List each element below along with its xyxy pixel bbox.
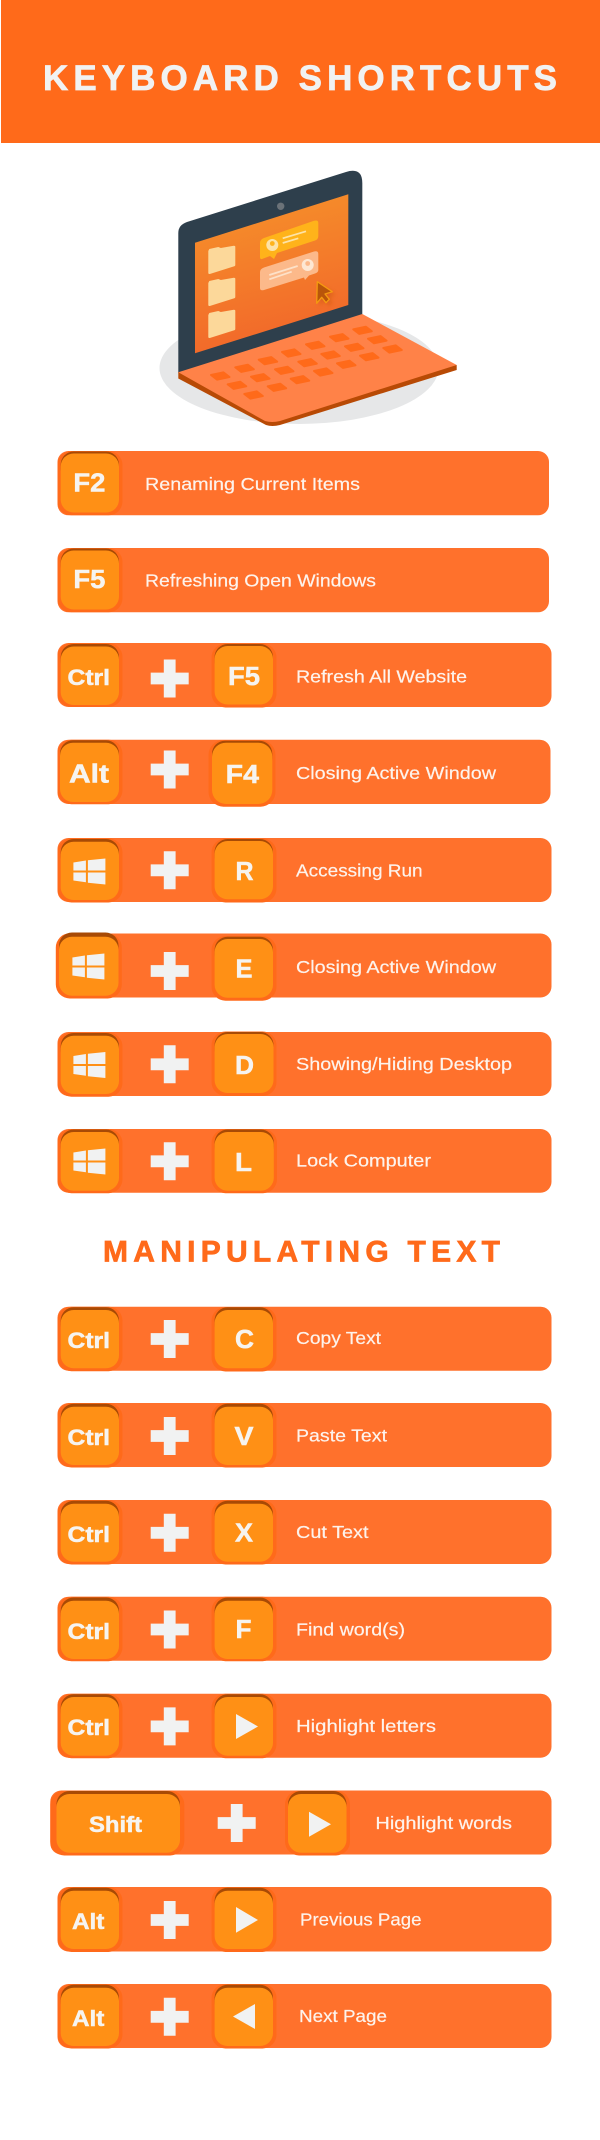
- description: Next Page: [299, 2006, 387, 2026]
- icon: windows logo: [72, 954, 104, 980]
- icon: windows logo: [73, 1148, 105, 1174]
- plus: [151, 851, 189, 889]
- key: D: D: [235, 1052, 254, 1080]
- yellow chat bubble: [260, 220, 318, 259]
- header banner: [1, 0, 600, 143]
- heading: manipulating text: MANIPULATING TEXT: [103, 1236, 500, 1268]
- key: Alt: [58, 1887, 122, 1952]
- description: Closing Active Window: [296, 763, 496, 783]
- icon: windows logo: [73, 1052, 105, 1078]
- row: Alt + right arrow: [58, 1887, 552, 1952]
- plus: [218, 1804, 256, 1842]
- key: Ctrl: Ctrl: [68, 1425, 110, 1450]
- key: L: [212, 1129, 277, 1193]
- key: Windows: [56, 932, 122, 998]
- title: KEYBOARD SHORTCUTS: [43, 59, 557, 98]
- laptop base edge: [178, 365, 457, 426]
- webcam: [277, 203, 284, 210]
- row: Ctrl + V: [58, 1403, 552, 1468]
- row: Ctrl + X: [58, 1500, 552, 1564]
- description: Closing Active Window: [296, 957, 496, 977]
- key: Windows: [58, 1032, 122, 1097]
- key: Alt: Alt: [72, 2006, 105, 2031]
- key: F5: F5: [228, 663, 260, 691]
- plus: [151, 1320, 189, 1358]
- row: Win + D: [58, 1032, 552, 1097]
- keyboard keys: [211, 327, 402, 399]
- key: F: [212, 1597, 276, 1661]
- key: F4: F4: [226, 761, 260, 789]
- description: Paste Text: [296, 1426, 387, 1446]
- key: F5: F5: [73, 566, 105, 594]
- row: Alt + F4: [58, 740, 550, 807]
- description: Copy Text: [296, 1328, 381, 1348]
- key: Ctrl: [58, 1307, 122, 1371]
- key: F4: [208, 740, 276, 807]
- description: Accessing Run: [296, 861, 423, 881]
- description: Lock Computer: [296, 1151, 431, 1171]
- row: Ctrl + C: [58, 1307, 552, 1372]
- key: Ctrl: [58, 643, 122, 707]
- row: Shift + right arrow: [50, 1790, 552, 1856]
- row: Win + R: [58, 838, 552, 902]
- key: Alt: [58, 740, 122, 804]
- description: Find word(s): [296, 1620, 405, 1640]
- description: Showing/Hiding Desktop: [296, 1054, 512, 1074]
- plus: [151, 1610, 189, 1648]
- plus: [151, 1045, 189, 1083]
- description: Previous Page: [300, 1910, 422, 1930]
- plus: [151, 1142, 189, 1180]
- key: L: L: [235, 1149, 252, 1177]
- description: Highlight words: [375, 1813, 512, 1833]
- description: Refreshing Open Windows: [145, 571, 376, 591]
- key: Ctrl: [58, 1597, 122, 1661]
- key: Alt: Alt: [72, 1909, 105, 1934]
- key: D: [212, 1032, 276, 1096]
- key: F2: [58, 451, 122, 515]
- plus: [151, 750, 189, 788]
- key: Ctrl: [58, 1403, 122, 1468]
- key: Alt: [58, 1984, 122, 2048]
- key: Alt: Alt: [69, 760, 110, 788]
- description: Refresh All Website: [296, 667, 467, 687]
- key: Windows: [58, 1129, 122, 1193]
- key: X: [212, 1500, 276, 1564]
- key: F2: F2: [73, 470, 105, 498]
- plus: [151, 1417, 189, 1455]
- plus: [151, 952, 189, 990]
- key: Shift: [50, 1790, 184, 1856]
- key: Ctrl: [58, 1500, 122, 1564]
- description: Highlight letters: [296, 1716, 436, 1736]
- key: R: R: [236, 858, 254, 886]
- laptop screen: [195, 194, 348, 353]
- description: Cut Text: [296, 1522, 369, 1542]
- plus: [151, 660, 189, 698]
- plus: [151, 1514, 189, 1552]
- plus: [151, 1998, 189, 2036]
- key: F: F: [236, 1616, 252, 1644]
- key: Ctrl: Ctrl: [68, 665, 110, 690]
- icon: windows logo: [73, 858, 105, 884]
- row: Win + E: [56, 932, 552, 1001]
- row: Ctrl + F: [58, 1597, 552, 1661]
- key: V: V: [234, 1423, 254, 1451]
- key: V: [212, 1403, 276, 1468]
- key: X: X: [235, 1520, 253, 1548]
- key: right arrow: [285, 1790, 350, 1856]
- plus: [151, 1707, 189, 1745]
- key: C: [212, 1307, 276, 1372]
- key: C: C: [235, 1326, 254, 1354]
- peach chat bubble: [260, 251, 318, 290]
- key: Ctrl: [58, 1694, 122, 1758]
- laptop base: [178, 314, 457, 422]
- key: Ctrl: Ctrl: [68, 1522, 110, 1547]
- laptop illustration: [160, 171, 457, 426]
- key: Windows: [58, 838, 122, 902]
- key: E: [212, 936, 276, 1001]
- key: R: [212, 838, 276, 902]
- plus: [151, 1901, 189, 1939]
- row: Alt + left arrow: [58, 1984, 552, 2048]
- row: Ctrl + F5: [58, 643, 552, 708]
- laptop shadow: [160, 312, 438, 424]
- key: right arrow: [212, 1887, 276, 1952]
- description: Renaming Current Items: [145, 474, 360, 494]
- key: F5: [58, 548, 122, 612]
- row: Ctrl + right arrow: [58, 1694, 552, 1758]
- row: Win + L: [58, 1129, 552, 1193]
- key: F5: [212, 644, 276, 708]
- key: left arrow: [212, 1984, 276, 2048]
- key: Ctrl: Ctrl: [68, 1715, 110, 1740]
- key: Ctrl: Ctrl: [68, 1328, 110, 1353]
- row: F5: [58, 548, 549, 612]
- cursor: [317, 282, 335, 306]
- laptop lid: [178, 171, 362, 373]
- key: Shift: Shift: [89, 1812, 143, 1837]
- key: right arrow: [212, 1694, 276, 1758]
- key: E: E: [236, 956, 252, 984]
- folders: [208, 246, 235, 338]
- key: Ctrl: Ctrl: [68, 1619, 110, 1644]
- row: F2: [58, 451, 549, 515]
